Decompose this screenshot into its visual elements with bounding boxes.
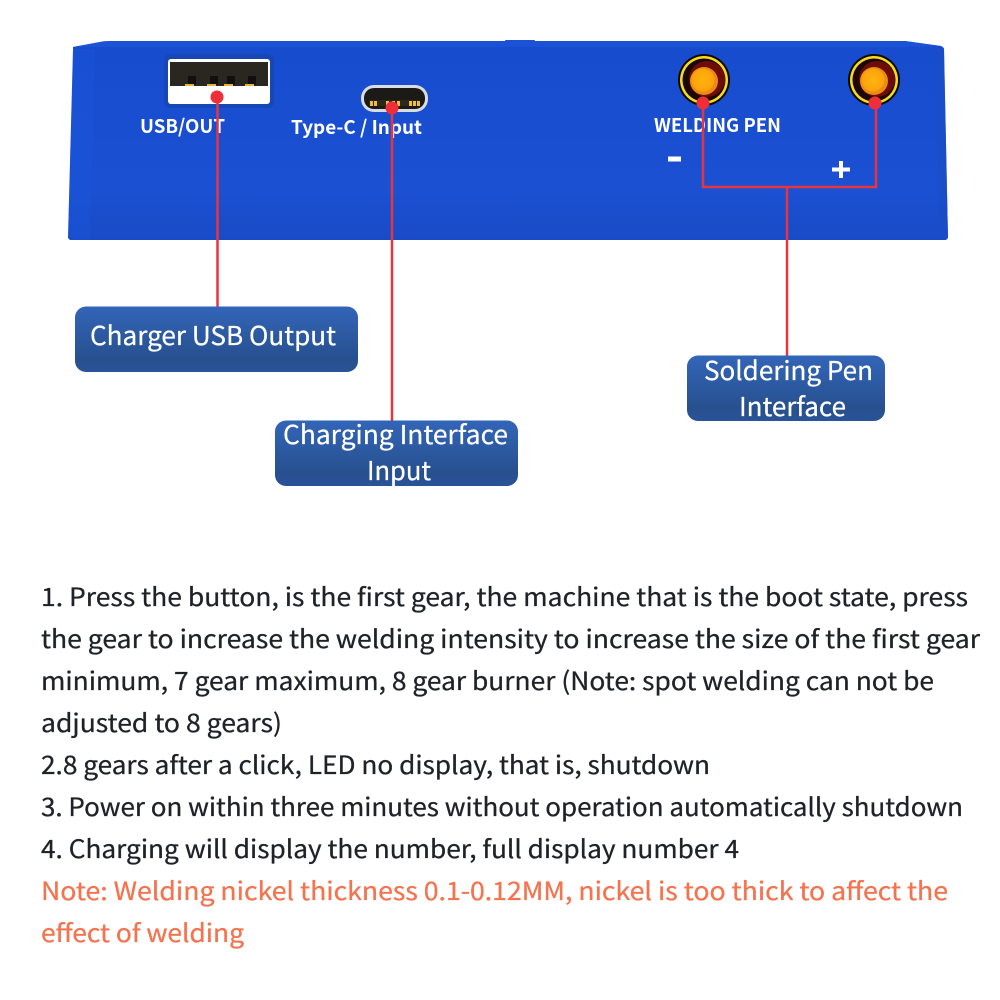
instructions text block: minimum, 7 gear maximum, 8 gear burner (Note: spot welding can not be <box>41 662 934 698</box>
callout: soldering pen interface: Interface <box>739 387 846 424</box>
note in orange <box>41 872 948 950</box>
WELDING PEN printed label: WELDING PEN <box>654 111 781 138</box>
instructions text block: the gear to increase the welding intensity to increase the size of the first gear <box>41 620 980 656</box>
callout: soldering pen interface <box>687 351 885 424</box>
callout: charging interface input: Input <box>367 451 431 488</box>
USB port <box>164 54 274 108</box>
callout: charging interface input: Charging Interface <box>283 415 508 452</box>
Type-C / Input printed label: Type-C / Input <box>291 113 422 140</box>
leader line: USB output <box>210 90 224 307</box>
leader line: Type-C input <box>386 102 398 421</box>
callout: charger USB output: Charger USB Output <box>90 316 336 353</box>
Type-C port <box>361 85 428 112</box>
device body <box>68 40 948 240</box>
negative socket <box>678 54 730 106</box>
plus sign <box>832 161 850 178</box>
callout: charger USB output <box>75 306 358 372</box>
instructions text block: 3. Power on within three minutes without operation automatically shutdown <box>41 788 963 824</box>
note in orange: effect of welding <box>41 914 244 950</box>
instructions text block: adjusted to 8 gears) <box>41 704 282 740</box>
instructions text block: 2.8 gears after a click, LED no display, that is, shutdown <box>41 746 710 782</box>
instructions text block <box>41 578 980 866</box>
positive socket <box>848 54 900 106</box>
USB/OUT printed label: USB/OUT <box>140 112 225 139</box>
callout: charging interface input <box>275 415 518 488</box>
instructions text block: 4. Charging will display the number, full display number 4 <box>41 830 739 866</box>
leader line: welding pen sockets <box>696 96 882 357</box>
minus sign <box>668 156 681 162</box>
callout: soldering pen interface: Soldering Pen <box>704 351 873 388</box>
instructions text block: 1. Press the button, is the first gear, the machine that is the boot state, press <box>41 578 968 614</box>
note in orange: Note: Welding nickel thickness 0.1-0.12MM, nickel is too thick to affect the <box>41 872 948 908</box>
